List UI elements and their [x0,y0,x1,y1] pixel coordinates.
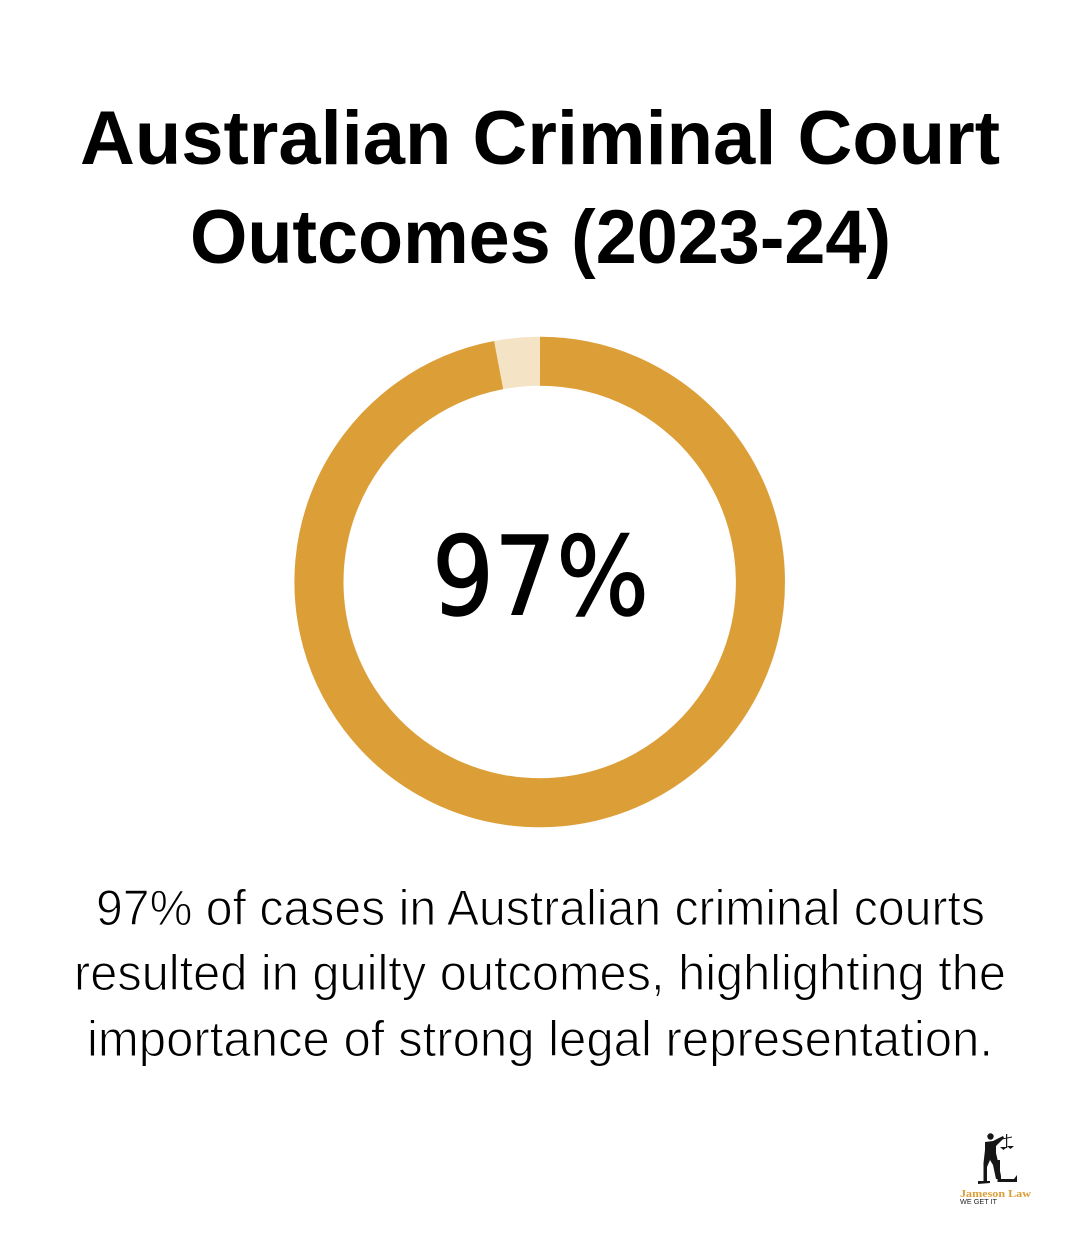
title [80,96,1000,280]
description text: 97% of cases in Australian criminal courts [96,880,985,936]
title: Australian Criminal Court [80,96,1000,181]
ring: full track in light tint [319,361,761,803]
logo wordmark: Jameson Law [960,1188,1031,1200]
description text [74,880,1006,1067]
ring: 97 percent segment [319,361,760,803]
logo: Jameson Law [960,1133,1031,1206]
center value: 97% [432,514,649,640]
description text: importance of strong legal representation. [87,1011,993,1067]
logo tagline: WE GET IT [960,1199,998,1206]
donut chart: 97% [319,361,761,803]
icon: lady justice [978,1133,1017,1184]
description text: resulted in guilty outcomes, highlighting the [74,945,1006,1001]
title: Outcomes (2023-24) [190,195,891,280]
